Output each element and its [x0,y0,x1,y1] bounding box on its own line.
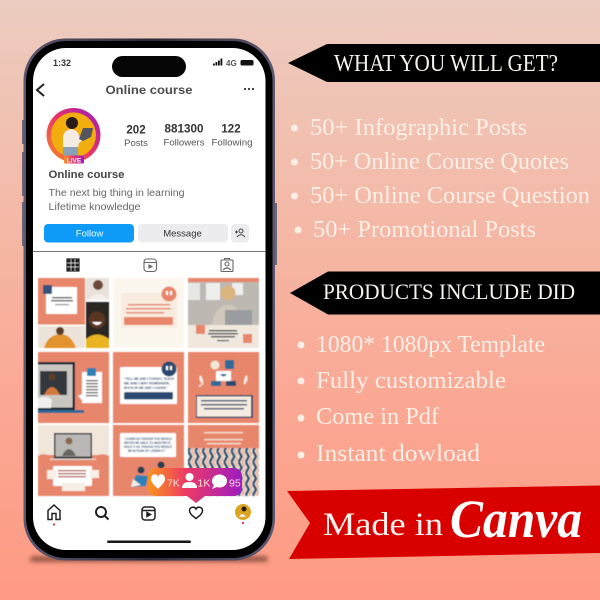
item 3: 50+ Online Course Question [310,183,590,209]
nav avatar [235,504,251,520]
banner: made in canva: Made in [323,507,443,543]
ribbon: what you will get: WHAT YOU WILL GET? [334,51,558,77]
item 1: 1080* 1080px Template [316,332,545,358]
item 4: Instant dowload [316,441,480,467]
phone screen [33,48,266,550]
post tile 5: navy quote: INVOLVE ME AND I LEARN." [124,386,168,390]
profile buttons: Follow [76,228,103,240]
bottom navigation [48,504,251,520]
profile bio: The next big thing in learning [48,188,184,199]
post tile 8: learn quote: HOLD IT AS THOUGH YOU WOULD [124,445,173,449]
profile stats: 881300 [164,124,204,136]
post grid [38,278,259,496]
item 2: 50+ Online Course Quotes [310,149,569,175]
post tile 9: wave pattern [188,425,259,496]
profile stats: 122 [221,124,241,136]
profile stats: Following [212,138,252,148]
profile tab icons [67,258,233,272]
profile bio: Online course [48,169,124,181]
status bar: 1:32 [53,58,71,68]
profile header: Online course [106,83,193,97]
post tile 8: learn quote: NEVER BE ABLE TO MASTER IT; [124,441,171,445]
ribbon: products include [290,272,600,314]
post tile 7: laptop and questions [38,425,109,496]
post tile 5: navy quote: "TELL ME AND I FORGET, TEACH [124,377,174,381]
banner: made in canva [287,486,600,559]
item 3: Come in Pdf [316,404,439,430]
post tile 5: navy quote [113,352,184,423]
nav reels [142,507,155,520]
profile stats [124,124,252,149]
profile buttons: Message [163,228,202,240]
profile buttons [44,224,249,242]
profile header [37,83,254,97]
post tile 8: learn quote: "LEARN AS THOUGH YOU WOULD [124,437,173,441]
item 4: 50+ Promotional Posts [313,217,536,243]
banner: made in canva: Canva [450,489,582,549]
phone frame [22,38,277,560]
profile bio [48,169,184,213]
phone shadow [30,556,268,562]
item 1: 50+ Infographic Posts [310,115,527,141]
post tile 6: question with icons [188,352,259,423]
nav red dots [53,522,244,526]
post tile 2: quote on cream [113,278,184,348]
ribbon: products include: PRODUCTS INCLUDE DID [323,279,575,304]
post tile 1: photo collage [38,278,109,348]
reaction notification bubble [148,468,242,503]
woman with laptop [63,117,93,159]
list: what you will get [291,115,590,243]
post tile 5: navy quote: ME AND I MAY REMEMBER, [124,382,170,386]
phone mockup [22,38,277,562]
status bar: 4G [226,59,237,68]
post tile 8: learn quote [113,425,184,496]
reaction notification bubble: 95 [229,478,241,490]
ribbon: what you will get [288,44,600,82]
item 2: Fully customizable [316,368,506,394]
profile stats: 202 [126,124,146,136]
reaction notification bubble: 7K [167,478,180,490]
home indicator [107,540,191,543]
profile stats: Posts [124,138,148,149]
list: products include [298,332,545,467]
post tile 3: woman at laptop [188,278,259,348]
reaction notification bubble: 1K [198,478,210,490]
nav heart [190,507,202,518]
profile avatar: LIVE [67,157,82,164]
profile avatar [46,108,100,164]
nav search [96,507,108,520]
post tile 8: learn quote: BE IN FEAR OF LOSING IT." [128,449,166,453]
nav home [48,505,60,520]
status bar [53,56,254,77]
profile stats: Followers [164,138,205,148]
profile bio: Lifetime knowledge [48,202,141,213]
post tile 4: laptop question [38,352,109,423]
